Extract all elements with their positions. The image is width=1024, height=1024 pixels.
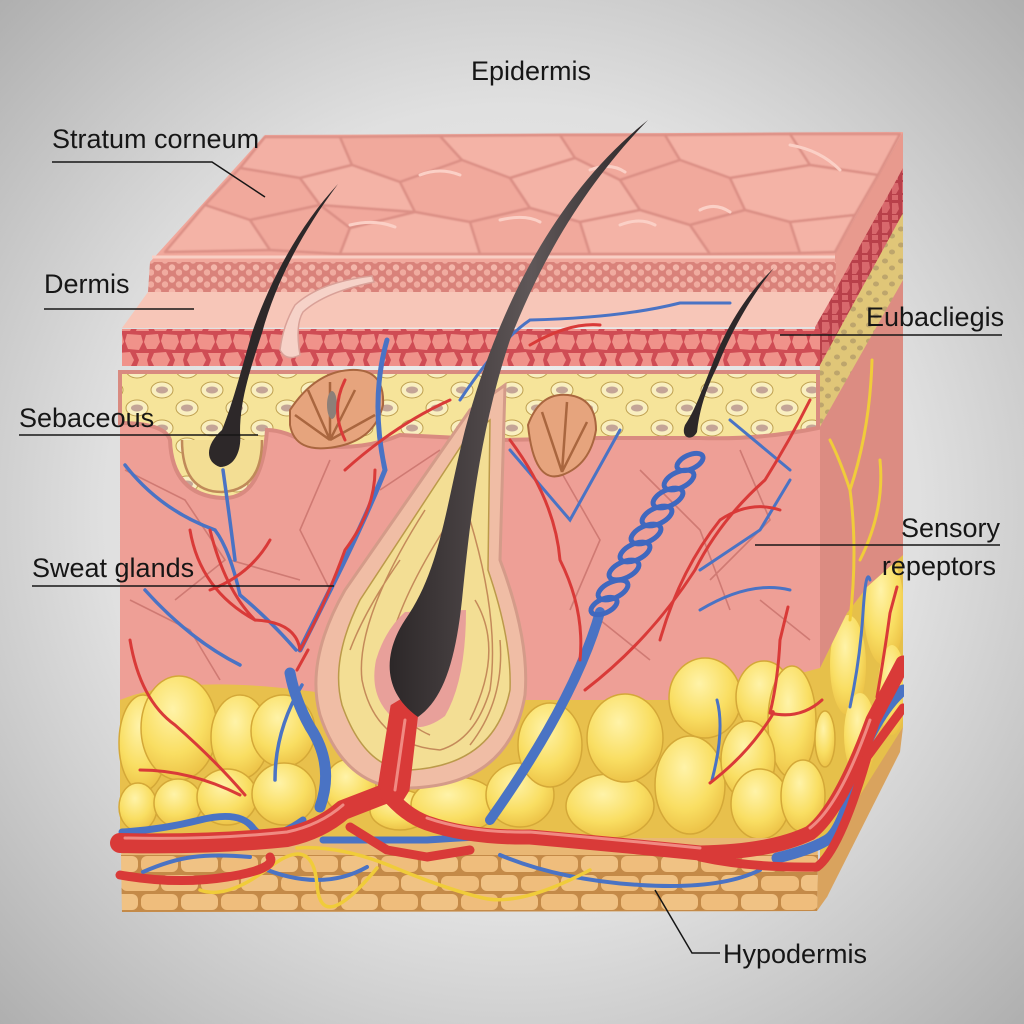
panel: stratum corneum top surface xyxy=(150,132,903,262)
panel: hypodermis base xyxy=(121,838,818,912)
icon: sebaceous glands xyxy=(290,370,596,476)
panel: granular band xyxy=(148,262,836,292)
label: Hypodermis xyxy=(655,890,867,969)
label: Epidermis: Epidermis xyxy=(471,56,591,86)
icon: vessel highlights xyxy=(125,720,870,848)
label: Sensory repeptors: repeptors xyxy=(882,551,996,581)
label: Sebaceous: Sebaceous xyxy=(19,403,154,433)
panel: red cell layer xyxy=(122,329,820,366)
icon: coiled sweat gland xyxy=(588,450,706,618)
panel: fat cells xyxy=(119,658,835,839)
icon: right hair xyxy=(684,268,774,438)
panel: follicle bulb sheath xyxy=(316,385,526,788)
label: Hypodermis: Hypodermis xyxy=(723,939,867,969)
label: Sensory repeptors xyxy=(755,513,1000,581)
label: Sweat glands: Sweat glands xyxy=(32,553,194,583)
label: Dermis: Dermis xyxy=(44,269,130,299)
panel: light pink slab xyxy=(122,292,835,328)
skin block xyxy=(119,120,906,912)
chart: red vessels xyxy=(120,325,903,881)
panel: yellow cell layer xyxy=(120,372,818,498)
label: Eubacliegis: Eubacliegis xyxy=(866,302,1004,332)
icon: pale duct xyxy=(280,276,374,358)
icon: left hair xyxy=(209,184,338,467)
icon: large hair shaft xyxy=(390,120,648,717)
panel: hypodermis fatty layers xyxy=(121,855,818,912)
panel: right side face xyxy=(815,132,906,911)
label: Sensory repeptors: Sensory xyxy=(901,513,1000,543)
label: Stratum corneum xyxy=(52,124,265,197)
icon: yellow nerve xyxy=(200,360,881,907)
chart: blue vessels xyxy=(122,303,903,886)
panel: pink dermis xyxy=(120,425,820,705)
label: Stratum corneum: Stratum corneum xyxy=(52,124,259,154)
panel: left follicle pocket xyxy=(182,440,262,492)
